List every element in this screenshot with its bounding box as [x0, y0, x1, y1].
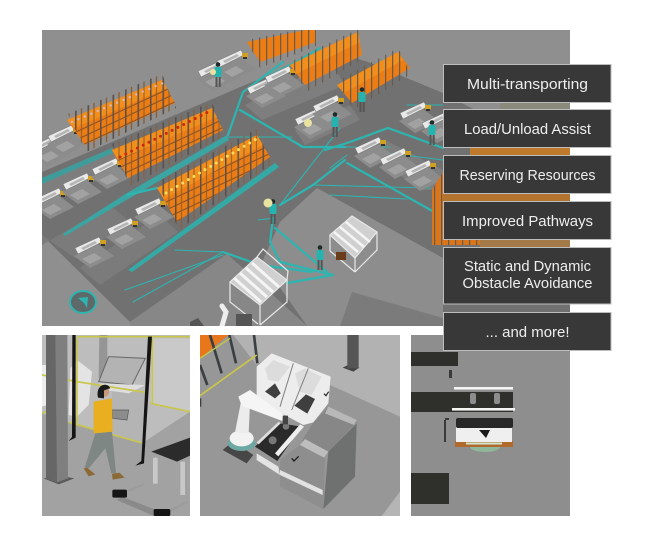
panel: mobile robot top view — [411, 335, 570, 516]
orange storage rack 6 — [337, 48, 411, 110]
grey cabinet — [280, 407, 357, 509]
robot arm — [223, 390, 288, 463]
label: Load/Unload Assist: Load/Unload Assist — [464, 122, 591, 138]
label: Static and Dynamic Obstacle Avoidance: Static and Dynamic — [464, 259, 591, 275]
stacked box — [112, 410, 129, 420]
orange storage rack 7 (behind labels) — [432, 172, 480, 245]
label: Reserving Resources — [444, 156, 611, 194]
light floor area: centre — [262, 188, 443, 326]
image strips visible between labels — [443, 102, 570, 247]
posts — [444, 370, 452, 442]
label: Reserving Resources: Reserving Resources — [460, 168, 596, 184]
light floor area: bottom — [130, 254, 307, 326]
orange storage rack 2 — [112, 102, 224, 186]
black bench: middle with fixtures — [411, 387, 515, 412]
teal agent paths — [42, 48, 443, 302]
orange storage rack 3 — [157, 129, 271, 230]
white equipment at left — [42, 365, 46, 406]
label: Static and Dynamic Obstacle Avoidance: Obstacle Avoidance — [462, 276, 592, 292]
panel: worker close-up — [42, 335, 190, 517]
white storage unit — [257, 353, 331, 425]
mobile robot — [455, 418, 513, 452]
upper light floor — [233, 335, 400, 417]
pale corner — [382, 492, 400, 516]
rack posts and fence — [200, 335, 257, 407]
darker floor corner — [340, 292, 443, 326]
label: Load/Unload Assist — [444, 110, 611, 148]
safety fence lines — [42, 337, 190, 443]
label: and more: ... and more! — [486, 325, 570, 341]
robot arm — [190, 306, 252, 326]
black fence posts — [69, 335, 152, 466]
cart: left — [230, 249, 288, 325]
orange storage rack 5 — [290, 29, 363, 92]
infographic canvas — [42, 30, 612, 516]
robot in background — [69, 360, 92, 417]
floor markers — [112, 490, 170, 516]
cart: right — [330, 216, 377, 272]
orange storage rack 1 — [67, 74, 176, 152]
side wall — [150, 338, 190, 411]
back wall — [42, 335, 190, 443]
rear machine — [99, 357, 145, 393]
lower wall — [112, 392, 145, 442]
workstations — [31, 50, 461, 268]
icon: navigation compass — [70, 291, 96, 313]
support pillar — [44, 335, 74, 484]
black tool table with fixtures — [255, 422, 304, 475]
rear column — [99, 335, 107, 378]
orange storage rack 4 — [247, 26, 316, 68]
black bench: bottom — [411, 473, 449, 504]
label: and more — [444, 312, 611, 350]
panel: robot arm close-up — [200, 335, 400, 516]
black table — [151, 438, 190, 495]
feature list — [444, 64, 611, 350]
label: Improved Pathways — [444, 202, 611, 240]
light station floor strips — [42, 148, 122, 196]
support post — [343, 335, 359, 372]
label: Improved Pathways: Improved Pathways — [462, 214, 593, 230]
panel: main warehouse simulation view — [31, 26, 570, 326]
orange rack corner — [200, 335, 228, 358]
label: Static and Dynamic Obstacle Avoidance — [444, 248, 611, 304]
worker in yellow shirt — [84, 385, 125, 480]
dark aisle floor — [42, 50, 570, 326]
workers — [210, 62, 436, 270]
label: Multi-transporting — [444, 64, 611, 102]
label: Multi-transporting: Multi-transporting — [467, 77, 588, 93]
black bench: top — [411, 352, 458, 366]
